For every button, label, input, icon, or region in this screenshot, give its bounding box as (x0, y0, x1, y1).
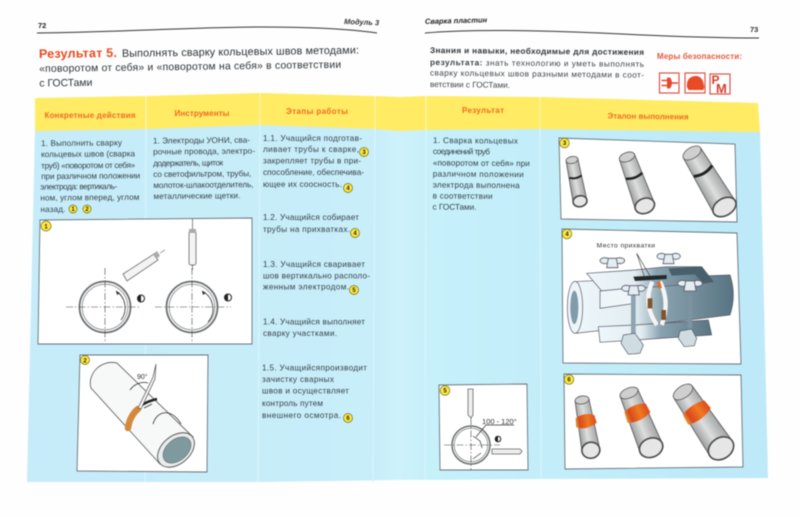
text: work stages column: ющее их соосность. (263, 180, 342, 189)
text: specific actions column: 1. Выполнить сварку (41, 138, 123, 148)
icon: pipe mouth (567, 281, 583, 333)
title: result 5: «поворотом от себя» и «поворотом на себя» в соответствии (39, 59, 341, 75)
column headers: right page: Эталон выполнения (607, 111, 689, 122)
icon: left pipe section (66, 268, 141, 343)
running head: right page: Сварка пластин (425, 15, 488, 26)
text: work stages column: 1.3. Учащийся сваривает (263, 260, 365, 269)
text: specific actions column: электрода: вертикаль- (40, 182, 118, 192)
panel: yellow table header (35, 93, 760, 132)
icon: bracket front face (600, 288, 635, 308)
panel 4: pipes in clamp: 4 (565, 232, 569, 238)
title: result 5 (39, 43, 359, 89)
label: tack weld location: Место прихватки (597, 242, 655, 249)
icon: PM sign (710, 73, 730, 96)
text: work stages column (262, 134, 370, 420)
title: result 5: с ГОСТами (39, 78, 93, 89)
text: specific actions column: труб) «поворотом от себя» (41, 161, 136, 170)
text: work stages column: зачистку сварных (262, 375, 334, 384)
icon: medium welded pipe (616, 384, 666, 461)
icon: black seam gap (142, 399, 157, 405)
icon: vertical electrode (189, 219, 196, 270)
column headers: left page: Конкретные действия (44, 111, 136, 120)
text block: knowledge and skills: результата: знать технологию и уметь выполнять (430, 58, 644, 69)
icon: hard hat (685, 73, 705, 93)
text: tools column: додержатель, щиток (153, 158, 224, 168)
text: work stages column: 1.5. Учащийсяпроизводит (262, 364, 367, 372)
icon: dark clamp plates (633, 275, 667, 281)
page number and running head: left page: Модуль 3 (344, 17, 380, 27)
illustration: clamp assembly (567, 242, 733, 354)
panel 1: electrode positions diagram (38, 218, 252, 344)
icon: pipe body (575, 275, 733, 333)
text: tools column: металлические щетки. (153, 191, 241, 201)
panel 3: aligned pipes (559, 138, 740, 222)
markers 1 and 2: 2 (85, 207, 89, 213)
markers in stages column: 4 (353, 231, 357, 237)
text: specific actions column: кольцевых швов (сварка (41, 149, 136, 159)
icon: pipe body (90, 362, 193, 464)
column headers: right page (462, 106, 689, 122)
text: tools column: 1. Электроды УОНИ, сва- (153, 136, 250, 145)
text: specific actions column: при различном положении (41, 171, 140, 181)
text: result column: «поворотом от себя» при (433, 158, 530, 168)
text: specific actions column (40, 138, 140, 214)
text: work stages column: женным электродом. (263, 282, 349, 292)
panel 4: pipes in clamp (562, 229, 741, 364)
label: 90 degrees: 90° (137, 373, 148, 381)
icon: dark right plate (668, 267, 713, 283)
text block: knowledge and skills (430, 45, 644, 90)
icon: wing nuts (600, 253, 702, 295)
title: result 5: Результат 5. (39, 46, 117, 61)
panel 5: electrode angle diagram: 5 (443, 389, 447, 395)
icon: right pipe section (155, 268, 231, 343)
icon: pipe opening (151, 426, 201, 474)
text: work stages column: контроль путем (262, 399, 323, 408)
page number and running head: left page (37, 17, 380, 33)
icon: rotation arrows (130, 382, 181, 424)
running head: right page (425, 15, 759, 38)
icon: tilted electrode (123, 250, 165, 281)
text: result column: с ГОСТами. (433, 202, 477, 212)
markers 1 and 2 (69, 205, 91, 213)
text block: knowledge and skills: сварку кольцевых швов разными методами в соот- (430, 69, 644, 80)
text: work stages column: ливает трубы к сварке, (263, 145, 359, 154)
markers 1 and 2: 1 (71, 207, 75, 213)
text block: knowledge and skills: ветствии с ГОСТами. (430, 80, 510, 90)
icon: electrode at 90 degrees (138, 364, 156, 409)
icon: vertical electrode (468, 389, 473, 418)
heading: safety measures: Меры безопасности: (657, 52, 742, 61)
icon: PM sign: М (716, 81, 727, 96)
panel 6: welded pipes (564, 374, 743, 469)
icon: clamp bolts (621, 295, 697, 354)
text: work stages column: швов и осуществляет (262, 386, 349, 396)
markers in stages column (344, 148, 368, 422)
icon: half-filled arc symbols (138, 294, 232, 302)
icon: small welded pipe (571, 394, 603, 460)
text: work stages column: 1.2. Учащийся собирает (263, 213, 359, 222)
markers in stages column: 4 (346, 186, 350, 192)
text: specific actions column: ном, углом вперед, углом (40, 193, 140, 203)
column headers: left page: Этапы работы (286, 107, 348, 116)
text: result column: в соответствии (433, 191, 493, 201)
text: work stages column: способление, обеспечива- (263, 168, 364, 177)
text: work stages column: сварку участками. (263, 329, 337, 338)
markers in stages column: 5 (352, 288, 356, 294)
text: tools column: молоток-шлакоотделитель, (153, 180, 253, 190)
panel 2: pipe and electrode at 90 degrees: 2 (83, 358, 87, 364)
column headers: left page: Инструменты (174, 109, 230, 118)
label: angle range: 100 - 120° (482, 417, 517, 426)
text: result column: электрода выполнена (433, 180, 520, 190)
panel 3: aligned pipes: 3 (563, 141, 567, 147)
icon: large pipe (678, 142, 740, 221)
text: tools column: со светофильтром, трубы, (153, 169, 251, 179)
text: result column (433, 136, 530, 212)
panel 1: electrode positions diagram: 1 (44, 224, 48, 230)
icon: angle leader and arrows (473, 425, 514, 459)
icon: upper clamp bar (587, 267, 713, 291)
icon: PM sign: Р (712, 73, 720, 87)
text: result column: соединений труб (433, 147, 490, 156)
running head: right page: 73 (750, 25, 758, 34)
text: work stages column: шов вертикально располо- (263, 272, 370, 280)
title: result 5: Выполнять сварку кольцевых швов методами: (122, 45, 359, 60)
column headers: right page: Результат (462, 106, 504, 115)
text: work stages column: 1.1. Учащийся подготав- (263, 134, 362, 143)
icon: weld rings with tack marks (648, 282, 666, 325)
text block: knowledge and skills: Знания и навыки, необходимые для достижения (430, 45, 644, 57)
icons: safety signs (660, 73, 730, 96)
text: work stages column: трубы на прихватках. (263, 225, 350, 234)
icon: orange weld bead (128, 409, 138, 428)
icon: pipe section (444, 418, 500, 470)
markers in stages column: 3 (362, 150, 366, 156)
text: result column: 1. Сварка кольцевых (433, 136, 518, 146)
text: tools column: рочные провода, электро- (153, 147, 255, 156)
text: result column: различном положении (433, 169, 524, 179)
icon: electric plug (660, 73, 679, 93)
icon: medium pipe (616, 149, 657, 216)
icon: small pipe (564, 155, 588, 208)
panel 5: electrode angle diagram (439, 384, 528, 470)
text: specific actions column: назад. (40, 205, 65, 214)
text: tools column (153, 136, 256, 201)
markers in stages column: 6 (346, 416, 350, 422)
column headers: left page (44, 107, 348, 120)
panel 6: welded pipes: 6 (567, 378, 571, 384)
icon: lower clamp bar (598, 320, 712, 342)
text: work stages column: 1.4. Учащийся выполняет (263, 318, 365, 326)
icon: large welded pipe (668, 379, 739, 465)
text: work stages column: внешнего осмотра. (262, 411, 341, 420)
panel: light blue table body (27, 123, 768, 482)
text: work stages column: закрепляет трубы в при- (263, 156, 361, 166)
panel 2: pipe and electrode at 90 degrees (77, 355, 208, 474)
icon: leader lines (637, 253, 652, 280)
page number and running head: left page: 72 (38, 21, 46, 30)
icon: half mark (495, 436, 501, 442)
icon: horizontal electrode (492, 449, 522, 454)
